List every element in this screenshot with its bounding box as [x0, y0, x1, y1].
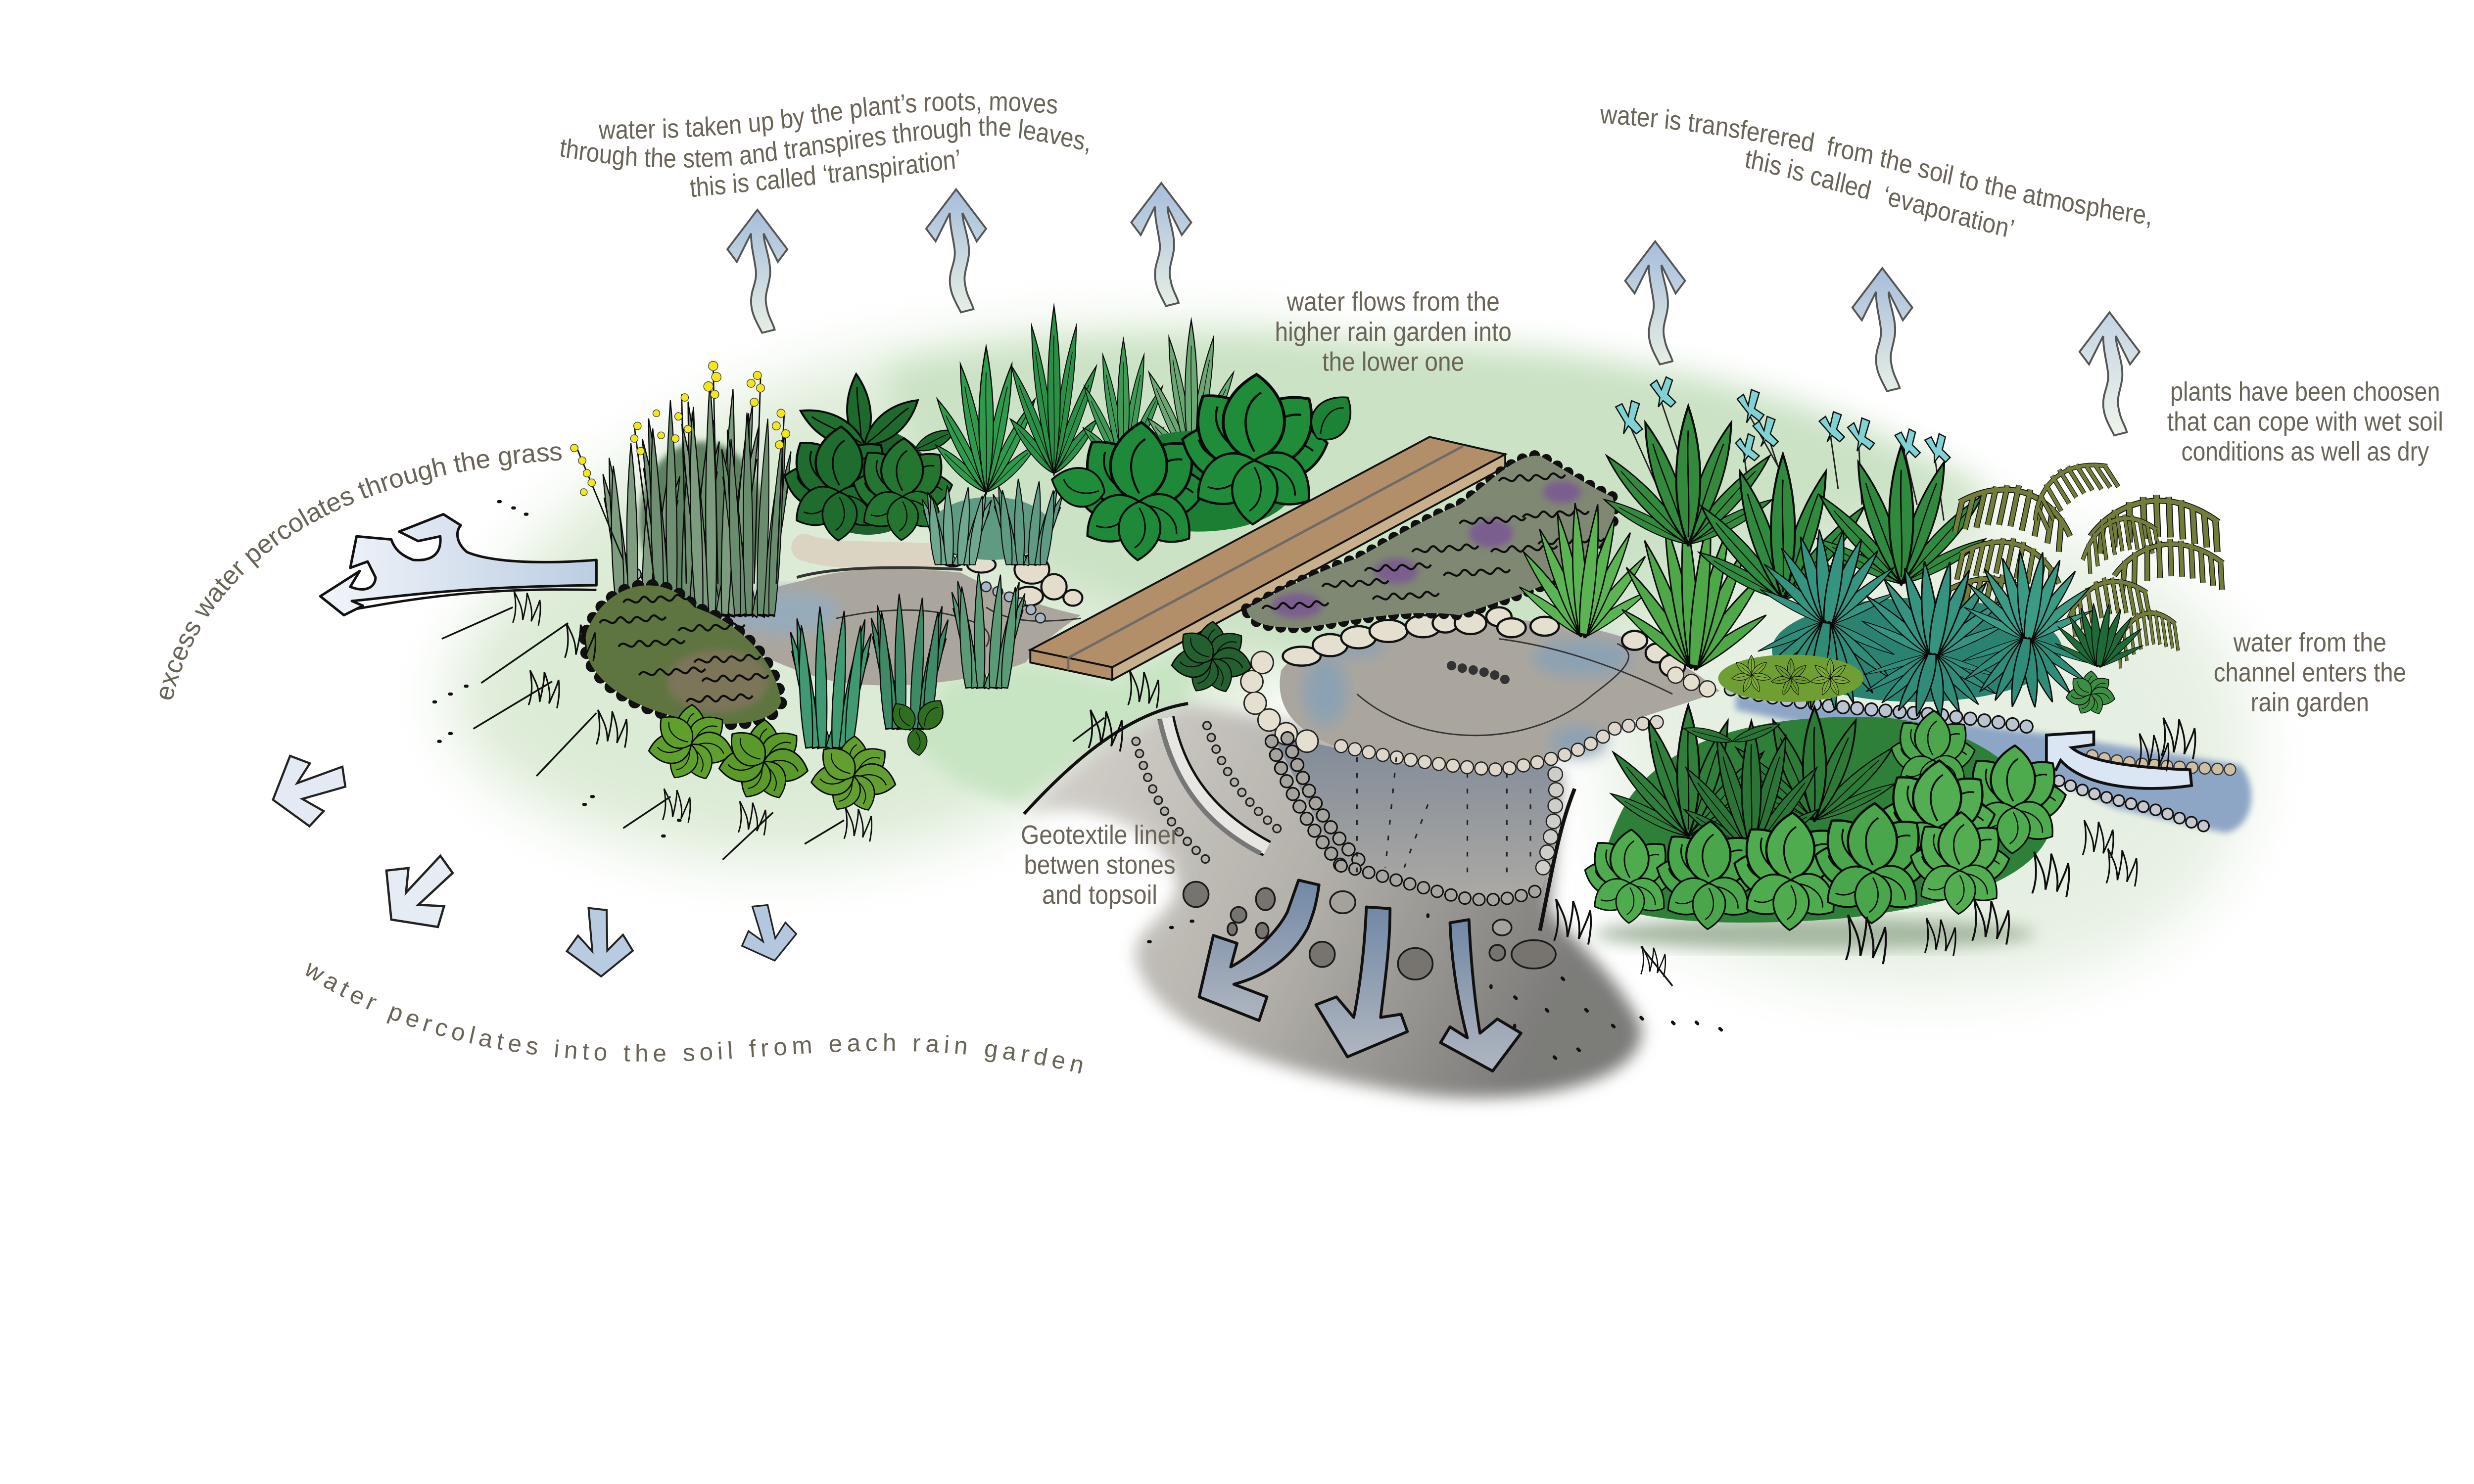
arrow: excess water spilling through grass — [320, 514, 596, 615]
inflow channel — [1731, 689, 2251, 833]
arrow: soil percolation 1 — [1199, 880, 1319, 1020]
tuft mass — [931, 497, 1051, 560]
plant: dark green shrub — [779, 373, 958, 541]
plant: large glossy hosta — [1047, 374, 1361, 560]
plank top — [1030, 437, 1505, 667]
pond 2 water patches — [1303, 637, 1633, 757]
plant: teal clumps — [1757, 529, 2094, 717]
dark small plant at base — [886, 698, 920, 735]
hosta mass — [1101, 431, 1297, 532]
pond 2 central stones — [1452, 666, 1508, 682]
text: grass percolation note: excess water percolates through the grass — [159, 446, 562, 699]
geotextile liner — [1166, 718, 1267, 849]
squiggle texture — [600, 615, 666, 623]
stone wall left of section — [1272, 738, 1360, 866]
upper-right hostas — [1887, 711, 1978, 797]
arrow: evaporation 3 — [2080, 312, 2140, 435]
plant: bright grass clumps — [1517, 503, 1768, 673]
plant: large front planting — [1580, 705, 2070, 950]
channel water — [1736, 694, 2251, 833]
plant: olive palm — [1943, 453, 2230, 668]
text: channel note: rain garden — [2251, 688, 2369, 717]
arrow: evaporation 1 — [1625, 241, 1685, 365]
percolation dashes in section — [1357, 757, 1530, 883]
text: transpiration note — [558, 86, 1140, 203]
text: evaporation note: water is transferered from the soil to the atmosphere, — [1600, 108, 2150, 229]
pond 2 rim stones back — [1283, 607, 1685, 677]
surface line of the bank — [1024, 703, 1188, 814]
background wash: upper meadow — [884, 337, 1988, 662]
spill shaft and arrow heads — [320, 514, 596, 615]
text: water flows note — [1275, 287, 1512, 376]
brown shading — [667, 650, 768, 713]
pond 1 left cobbles — [623, 571, 773, 702]
arrow: transpiration 2 — [926, 189, 986, 312]
text: water flows note: the lower one — [1322, 347, 1464, 376]
stone wall right of section — [1543, 765, 1556, 868]
foliage mass — [639, 442, 765, 600]
text: plant choice note: plants have been choosen — [2170, 377, 2440, 407]
plant: lime mound — [1718, 654, 1863, 702]
stone layer at base of section — [1341, 866, 1540, 900]
plant: yellow-flowered grass — [571, 361, 794, 619]
text: geotextile note: betwen stones — [1024, 850, 1176, 880]
arrow: transpiration 1 — [727, 210, 787, 333]
dark strap-leaved clumps — [1606, 705, 1770, 841]
arrow: percolation left 1 — [262, 742, 357, 835]
shrub mass — [1246, 456, 1615, 628]
arrow: percolation left 3 — [565, 906, 634, 978]
flower stems — [577, 366, 784, 584]
white gap behind label — [1013, 824, 1164, 937]
plant: bright iris clumps — [933, 306, 1237, 498]
channel cobbles top — [1731, 689, 2039, 729]
lower bright hostas — [1580, 830, 1679, 923]
pond 1 right cobbles — [986, 587, 1045, 623]
text: plant choice note — [2167, 377, 2443, 466]
channel cobbles lower right — [2059, 781, 2206, 827]
shadow under planting — [1594, 918, 2036, 950]
plant: small dark clump — [2053, 603, 2144, 717]
excavated cross-section — [1272, 734, 1557, 902]
text: water flows note: higher rain garden into — [1275, 317, 1512, 347]
shrub outline — [1246, 456, 1615, 628]
background wash: left lawn — [450, 333, 1388, 860]
plant: tall leaves with teal flowers — [1599, 377, 1991, 604]
text: channel note — [2214, 628, 2406, 717]
plant: lime rosettes — [646, 705, 899, 815]
spill lower edge — [357, 590, 596, 609]
right bank line — [1540, 788, 1574, 930]
text: channel note: channel enters the — [2214, 658, 2406, 688]
arrow: transpiration 3 — [1131, 183, 1191, 306]
text: transpiration note: water is taken up by the plant’s roots, moves — [599, 93, 1057, 139]
arrow: percolation left 2 — [364, 836, 475, 947]
text: plant choice note: conditions as well as dry — [2181, 437, 2429, 466]
squiggle texture — [1262, 601, 1329, 609]
text: geotextile note: and topsoil — [1042, 880, 1157, 910]
text: evaporation note: this is called ‘evaporation’ — [1746, 150, 2014, 237]
plant: purple-grey shrub — [1246, 456, 1615, 628]
plant: small dark shrub by plank — [1169, 622, 1254, 696]
plant: blue-green tufts — [916, 479, 1066, 566]
scalloped foliage — [585, 585, 781, 724]
rain garden 1 (upper) — [623, 548, 1083, 702]
pond 2 rim stones left — [1251, 662, 1308, 742]
text: geotextile note — [1021, 820, 1179, 910]
foliage mass — [1597, 717, 2051, 923]
pond 2 floor — [1280, 620, 1720, 772]
mound mass — [1718, 654, 1863, 702]
text: water flows note: water flows from the — [1286, 287, 1500, 317]
pond 2 sketch lines — [1357, 639, 1672, 736]
foliage — [1599, 406, 1777, 549]
pond 1 rear edge line — [797, 567, 962, 577]
text: soil percolation note: water percolates into the soil from each rain garden — [306, 963, 1083, 1073]
plant: grasses in upper pond — [784, 571, 1029, 757]
soil body — [1024, 703, 1641, 1098]
gravel beside the liner — [1136, 726, 1286, 864]
loose stones in soil — [1184, 882, 1556, 979]
scattered soil dots — [1148, 915, 1721, 1059]
purple shading — [1272, 481, 1581, 618]
text: transpiration note: through the stem and transpires through the leaves, — [561, 116, 1089, 170]
text: transpiration note: this is called ‘transpiration’ — [690, 149, 959, 197]
text: channel note: water from the — [2233, 628, 2386, 657]
lawn between the gardens — [907, 631, 1215, 804]
text: geotextile note: Geotextile liner — [1021, 820, 1179, 850]
pond 1 sketch lines — [836, 607, 1081, 647]
pond 2 rim stones front — [1341, 721, 1671, 770]
plank front face — [1030, 650, 1112, 680]
plant: mottled olive shrub — [585, 585, 781, 724]
rain garden 2 (lower) — [1251, 607, 1721, 900]
pond 2 rim stones right — [1675, 675, 1721, 694]
background wash: right lawn — [1594, 526, 2252, 988]
channel cobbles upper right — [2092, 755, 2234, 770]
pond 1 water patch left — [721, 590, 841, 634]
text: plant choice note: that can cope with wet soil — [2167, 407, 2443, 437]
teal mass — [1772, 598, 2062, 702]
pond 1 big stones — [942, 554, 1083, 605]
yellow flowers — [571, 361, 790, 496]
flower stems — [1630, 398, 1944, 520]
arrow: evaporation 2 — [1853, 268, 1912, 391]
plank side edge — [1112, 454, 1505, 680]
grass tufts and ink strokes on lawn — [434, 502, 2195, 986]
soil section — [1013, 703, 1721, 1098]
pond 1 floor — [721, 569, 1081, 686]
bridge plank — [1030, 437, 1505, 680]
teal flowers — [1616, 377, 1950, 462]
arrow: soil percolation 2 — [1316, 907, 1407, 1057]
pale stones behind pond 1 — [805, 548, 931, 557]
plank joint — [1068, 446, 1463, 670]
arrow: water entering rain garden — [2046, 732, 2191, 788]
arrow: percolation left 4 — [733, 897, 802, 968]
arrow: soil percolation 3 — [1440, 920, 1521, 1071]
shrub mass — [805, 427, 931, 535]
